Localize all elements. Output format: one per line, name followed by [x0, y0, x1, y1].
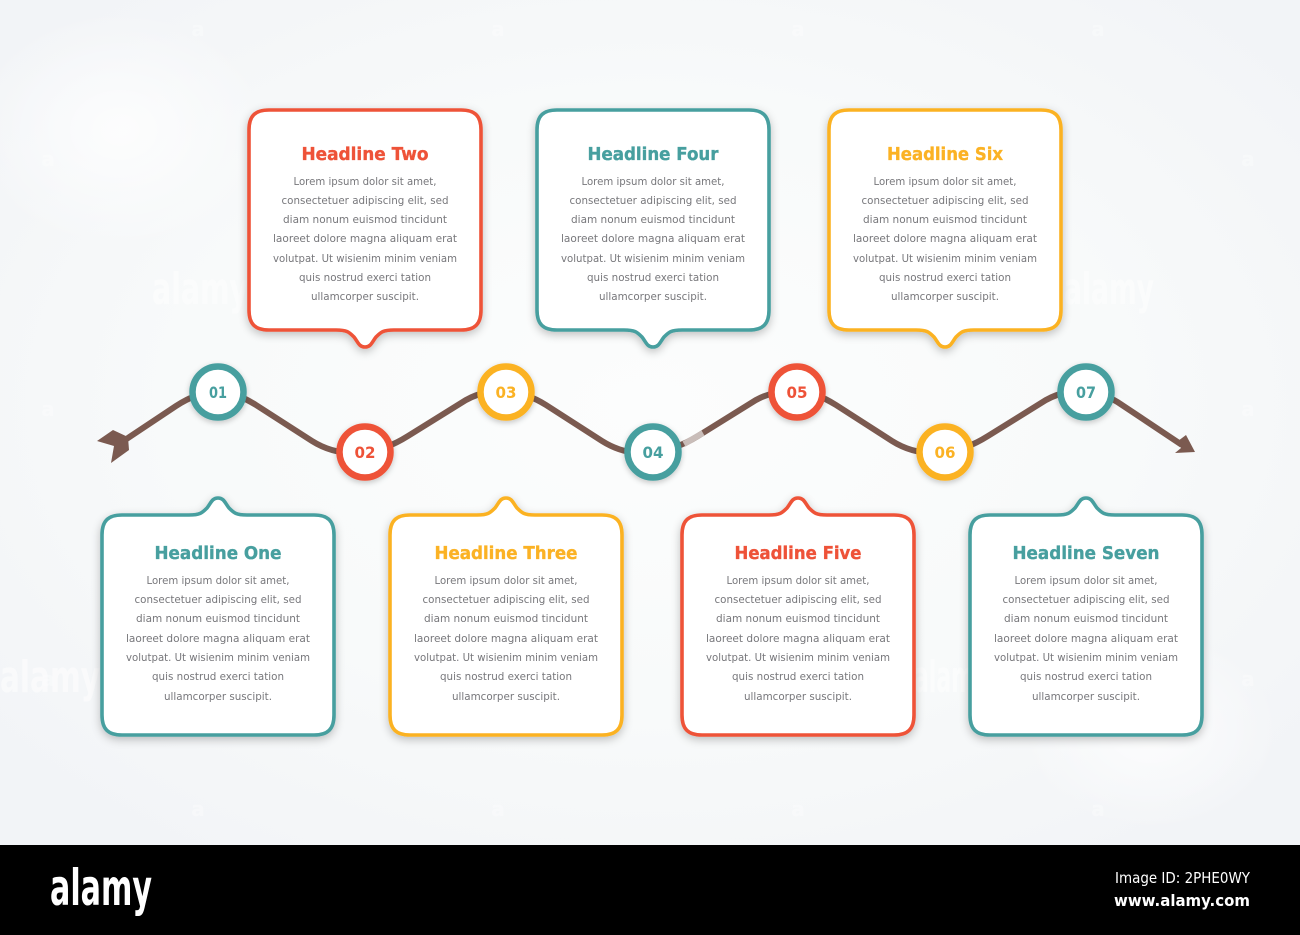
watermark: small marks: a	[491, 797, 505, 821]
panel: Headline One: quis nostrud exerci tation	[152, 670, 284, 683]
panel: Headline Five: quis nostrud exerci tation	[732, 670, 864, 683]
panel: Headline Six: Headline Six	[887, 145, 1004, 165]
panel: Headline Four: quis nostrud exerci tation	[587, 271, 719, 284]
panel: Headline One: diam nonum euismod tincidunt	[136, 612, 300, 625]
footer logo: alamy	[50, 859, 152, 917]
watermark: alamy ghost text: alamy	[152, 264, 248, 315]
marker 02: 02	[354, 443, 376, 462]
marker 03	[480, 366, 532, 418]
panel: Headline Six	[829, 110, 1061, 347]
panel: Headline Seven: consectetuer adipiscing elit, sed	[1002, 593, 1170, 606]
icon: arrow tail	[97, 430, 129, 463]
panel: Headline One: Lorem ipsum dolor sit amet,	[146, 574, 290, 587]
panel: Headline Five: diam nonum euismod tincidunt	[716, 612, 880, 625]
panel: Headline Three: diam nonum euismod tincidunt	[424, 612, 588, 625]
panel: Headline Five: Lorem ipsum dolor sit amet,	[726, 574, 870, 587]
panel: Headline Three: Lorem ipsum dolor sit amet,	[434, 574, 578, 587]
marker 04	[628, 426, 678, 478]
panel: Headline Three: consectetuer adipiscing elit, sed	[422, 593, 590, 606]
marker 07	[1060, 366, 1112, 418]
watermark: small marks: a	[191, 17, 205, 41]
watermark: small marks: a	[191, 797, 205, 821]
marker 01	[192, 366, 244, 418]
panel: Headline One: consectetuer adipiscing elit, sed	[134, 593, 302, 606]
timeline arrow line	[97, 392, 1195, 463]
panel: Headline One: laoreet dolore magna aliquam erat	[126, 632, 310, 645]
marker 05: 05	[786, 383, 808, 402]
panel: Headline Five: volutpat. Ut wisienim minim veniam	[706, 651, 890, 664]
panel: Headline Six: quis nostrud exerci tation	[879, 271, 1011, 284]
panel: Headline Three: volutpat. Ut wisienim minim veniam	[414, 651, 598, 664]
footer credits: Image ID: 2PHE0WY	[1115, 869, 1251, 887]
watermark: alamy ghost text: alamy	[0, 652, 100, 703]
timeline curve	[122, 392, 1182, 453]
panel: Headline Two: consectetuer adipiscing elit, sed	[282, 194, 448, 207]
panel: Headline Two: quis nostrud exerci tation	[299, 271, 431, 284]
panel: Headline Five: laoreet dolore magna aliquam erat	[706, 632, 890, 645]
watermark: alamy ghost text: alamy	[1064, 264, 1154, 315]
panel: Headline Seven: Headline Seven	[1012, 544, 1160, 564]
panel: Headline Five: ullamcorper suscipit.	[744, 690, 852, 703]
panel: Headline Three: quis nostrud exerci tation	[440, 670, 572, 683]
panel: Headline Five: Headline Five	[734, 544, 862, 564]
panel: Headline Six: diam nonum euismod tincidunt	[863, 213, 1027, 226]
panel: Headline Seven: volutpat. Ut wisienim minim veniam	[994, 651, 1178, 664]
marker 02	[340, 426, 390, 478]
panel: Headline Three: ullamcorper suscipit.	[452, 690, 560, 703]
marker 01: 01	[209, 383, 227, 402]
panel: Headline Two	[249, 110, 481, 347]
watermark: alamy ghost text	[0, 264, 1154, 703]
watermark: small marks: a	[1091, 797, 1105, 821]
panel: Headline One: Headline One	[154, 544, 282, 564]
watermark: small marks: a	[1241, 397, 1255, 421]
watermark: small marks: a	[41, 667, 55, 691]
panel: Headline Three	[390, 498, 622, 735]
watermark: alamy ghost text: alam	[914, 652, 974, 703]
panel: Headline Four	[537, 110, 769, 347]
panel: Headline Seven: laoreet dolore magna aliquam erat	[994, 632, 1178, 645]
panel: Headline Seven: quis nostrud exerci tation	[1020, 670, 1152, 683]
panel: Headline Two: volutpat. Ut wisienim minim veniam	[273, 252, 457, 265]
marker 07: 07	[1076, 383, 1096, 402]
panel: Headline Two: Headline Two	[302, 145, 428, 165]
panel: Headline Five	[682, 498, 914, 735]
panel: Headline Four: ullamcorper suscipit.	[599, 290, 707, 303]
watermark: small marks: a	[491, 17, 505, 41]
panel: Headline Six: consectetuer adipiscing elit, sed	[862, 194, 1028, 207]
panel: Headline Four: volutpat. Ut wisienim minim veniam	[561, 252, 745, 265]
panel: Headline Four: consectetuer adipiscing elit, sed	[570, 194, 736, 207]
panel: Headline One: ullamcorper suscipit.	[164, 690, 272, 703]
panel: Headline Four: laoreet dolore magna aliquam erat	[561, 232, 745, 245]
panel: Headline One	[102, 498, 334, 735]
panel: Headline Six: volutpat. Ut wisienim minim veniam	[853, 252, 1037, 265]
panel: Headline Five: consectetuer adipiscing elit, sed	[714, 593, 882, 606]
watermark: small marks: a	[1241, 667, 1255, 691]
panel: Headline Two: laoreet dolore magna aliquam erat	[273, 232, 457, 245]
panel: Headline Seven: Lorem ipsum dolor sit amet,	[1014, 574, 1158, 587]
footer credits: www.alamy.com	[1114, 891, 1250, 910]
panel: Headline Six: Lorem ipsum dolor sit amet,	[874, 175, 1016, 188]
watermark: small marks: a	[41, 147, 55, 171]
marker 05	[772, 366, 822, 418]
panel: Headline Six: ullamcorper suscipit.	[891, 290, 999, 303]
panel: Headline Seven: diam nonum euismod tincidunt	[1004, 612, 1168, 625]
panel: Headline Three: Headline Three	[434, 544, 578, 564]
panel: Headline Four: Lorem ipsum dolor sit amet,	[582, 175, 724, 188]
panel: Headline Two: Lorem ipsum dolor sit amet,	[294, 175, 436, 188]
ghost patch on line	[684, 433, 703, 444]
marker 06	[920, 426, 970, 478]
watermark: small marks: a	[1241, 147, 1255, 171]
panel: Headline Two: diam nonum euismod tincidunt	[283, 213, 447, 226]
panel: Headline Two: ullamcorper suscipit.	[311, 290, 419, 303]
footer bar	[0, 845, 1300, 935]
panel: Headline Seven: ullamcorper suscipit.	[1032, 690, 1140, 703]
panel: Headline Six: laoreet dolore magna aliquam erat	[853, 232, 1037, 245]
footer credits	[1114, 869, 1251, 910]
panel: Headline Seven	[970, 498, 1202, 735]
marker 06: 06	[934, 443, 956, 462]
marker 04: 04	[642, 443, 664, 462]
watermark: small marks: a	[791, 17, 805, 41]
panel: Headline One: volutpat. Ut wisienim minim veniam	[126, 651, 310, 664]
watermark: small marks: a	[791, 797, 805, 821]
watermark: small marks: a	[1091, 17, 1105, 41]
icon: arrow head	[1175, 435, 1195, 453]
panel: Headline Three: laoreet dolore magna aliquam erat	[414, 632, 598, 645]
panel: Headline Four: diam nonum euismod tincidunt	[571, 213, 735, 226]
watermark: small marks: a	[41, 397, 55, 421]
marker 03: 03	[496, 383, 516, 402]
panel: Headline Four: Headline Four	[588, 145, 719, 165]
